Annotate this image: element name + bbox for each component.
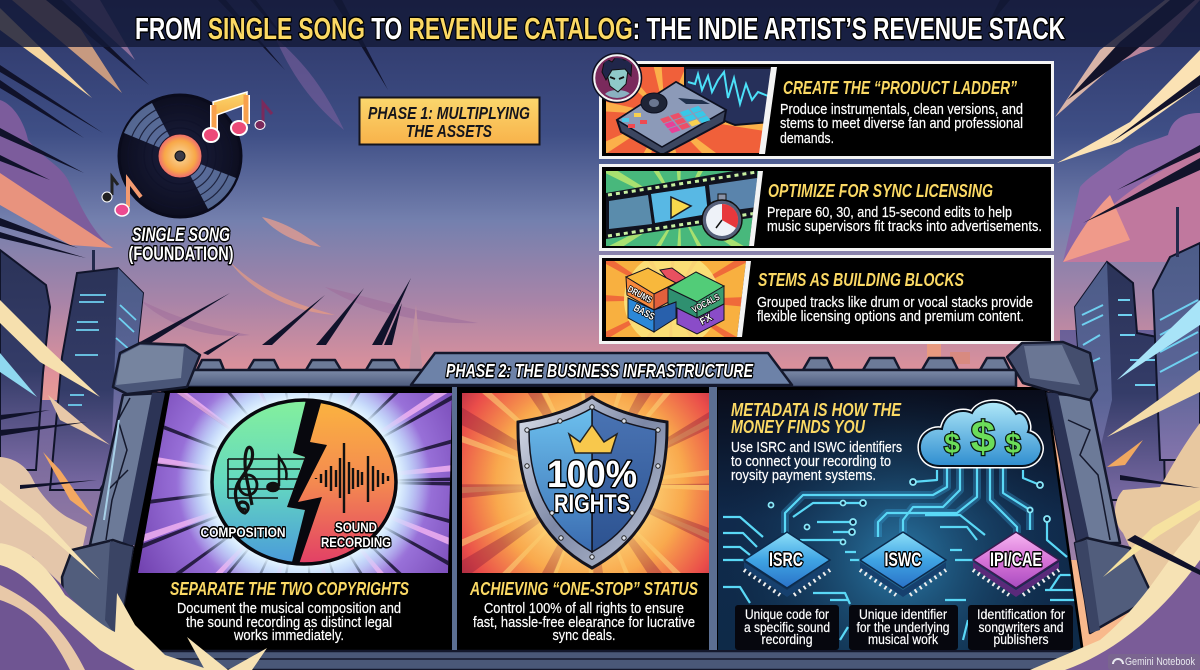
skyline centre (409, 305, 423, 373)
body text: Produce instrumentals, clean versions, and (780, 102, 1023, 118)
title bar (0, 0, 1200, 47)
heading: SEPARATE THE TWO COPYRIGHTS (170, 579, 409, 599)
caption: IPI/CAE: Identification for (977, 607, 1065, 622)
body text (757, 295, 1033, 325)
heading: OPTIMIZE FOR SYNC LICENSING (768, 181, 993, 201)
panel: stems as building blocks (599, 255, 1054, 344)
phase 2 heading banner (411, 353, 792, 385)
left clouds (0, 100, 112, 248)
left pillar (90, 393, 163, 545)
icon: sound wave (316, 443, 388, 513)
body text (731, 440, 902, 484)
phase 1 heading: PHASE 1: MULTIPLYING (368, 103, 530, 123)
caption: IPI/CAE: publishers (994, 632, 1049, 647)
heading: CREATE THE “PRODUCT LADDER” (783, 78, 1017, 98)
stone wall frame (62, 342, 1153, 670)
phase 1 heading: THE ASSETS (406, 121, 492, 141)
icon: crown (569, 425, 617, 453)
body text: works immediately. (233, 628, 344, 644)
text: 100% rights: 100% (547, 454, 637, 496)
body text: Control 100% of all rights to ensure (484, 601, 684, 617)
body text: flexible licensing options and premium content. (757, 309, 1024, 325)
illustration: split copyright circle: RECORDING (321, 534, 391, 550)
icon: money cloud: $ (1005, 428, 1021, 459)
title: FROM SINGLE SONG TO REVENUE CATALOG: THE INDIE ARTIST’S REVENUE STACK (135, 11, 1065, 46)
body text: sync deals. (552, 628, 616, 644)
illustration: split copyright circle: SOUND (335, 519, 377, 535)
lilac haze behind buildings (0, 400, 160, 570)
body text: stems to meet diverse fan and professional (780, 116, 1023, 132)
icon: music staff (228, 447, 306, 513)
panel: sync licensing (599, 164, 1054, 251)
body text (780, 102, 1023, 147)
heading (731, 400, 902, 437)
lower clouds (0, 457, 87, 590)
body text: the sound recording as distinct legal (186, 615, 392, 631)
watermark (1108, 654, 1200, 670)
panel: metadata (709, 387, 1081, 650)
caption: ISRC: Unique code for (745, 607, 829, 622)
body text: to connect your recording to (731, 454, 891, 470)
body text: demands. (780, 131, 834, 147)
burst streaks (0, 8, 92, 98)
illustration: rights shield: RIGHTS (554, 490, 630, 518)
body text (473, 601, 695, 644)
body text: Document the musical composition and (177, 601, 401, 617)
avatar (592, 54, 642, 102)
body text (177, 601, 401, 644)
left buildings (0, 250, 50, 470)
labels: COMPOSITION (200, 524, 286, 540)
illustration: stem blocks: BASS (632, 303, 656, 323)
caption: IPI/CAE: songwriters and (978, 620, 1064, 635)
body text (767, 205, 1042, 235)
icon: money cloud: $ (944, 428, 960, 459)
illustration: stem blocks (606, 261, 746, 337)
chip: ISRC: ISRC (769, 550, 803, 571)
caption: ISWC: musical work (868, 632, 938, 647)
caption: ISRC (735, 605, 839, 650)
phase 2 heading banner: PHASE 2: THE BUSINESS INFRASTRUCTURE (446, 361, 754, 381)
chip: ISWC (860, 532, 946, 597)
heading: STEMS AS BUILDING BLOCKS (758, 270, 964, 290)
icon: vinyl record with notes (102, 92, 272, 217)
caption: ISWC: for the underlying (856, 620, 950, 635)
caption: ISWC (849, 605, 958, 650)
illustration: stem blocks: VOCALS (690, 292, 721, 315)
heading: METADATA IS HOW THE (731, 400, 902, 420)
panel: one-stop status (462, 393, 709, 644)
label: single song foundation: SINGLE SONG (132, 225, 230, 246)
foreground clouds and spikes (0, 483, 1200, 670)
label: single song foundation: (FOUNDATION) (128, 244, 234, 265)
body text: fast, hassle-free elearance for lucrative (473, 615, 695, 631)
chip: IPI/CAE (973, 532, 1059, 597)
illustration: split copyright circle (138, 393, 452, 573)
phase 1 heading (360, 98, 540, 144)
chip: IPI/CAE: IPI/CAE (990, 550, 1042, 571)
caption: ISRC: recording (762, 632, 812, 647)
icon: money cloud: $ (971, 413, 995, 462)
panel: separate the two copyrights (138, 387, 457, 650)
panel: product ladder (592, 52, 1054, 159)
body text: Prepare 60, 30, and 15-second edits to help (767, 205, 1012, 221)
right pillar (1047, 393, 1120, 543)
body text: music supervisors fit tracks into advertisements. (767, 219, 1042, 235)
body text: roysity payment systems. (731, 468, 876, 484)
right buildings (1075, 262, 1165, 500)
illustration: rights shield (462, 393, 709, 573)
illustration: film strip and stopwatch (606, 171, 758, 246)
illustration: stem blocks: FX (698, 312, 714, 328)
illustration: beat machine (606, 67, 771, 153)
caption: ISWC: Unique identifier (859, 607, 947, 622)
chip: ISRC (744, 532, 830, 597)
body text: Grouped tracks like drum or vocal stacks provide (757, 295, 1033, 311)
label: single song foundation (128, 225, 234, 265)
body text: Use ISRC and ISWC identifiers (731, 440, 902, 456)
right clouds (1063, 113, 1200, 262)
caption: IPI/CAE (968, 605, 1073, 650)
illustration: stem blocks: DRUMS (626, 284, 654, 305)
chip: ISWC: ISWC (884, 550, 922, 571)
icon: money cloud (920, 402, 1041, 466)
heading: MONEY FINDS YOU (731, 417, 866, 437)
circuit traces (723, 468, 1080, 640)
heading: ACHIEVING “ONE-STOP” STATUS (469, 579, 698, 599)
caption: ISRC: a specific sound (744, 620, 830, 635)
